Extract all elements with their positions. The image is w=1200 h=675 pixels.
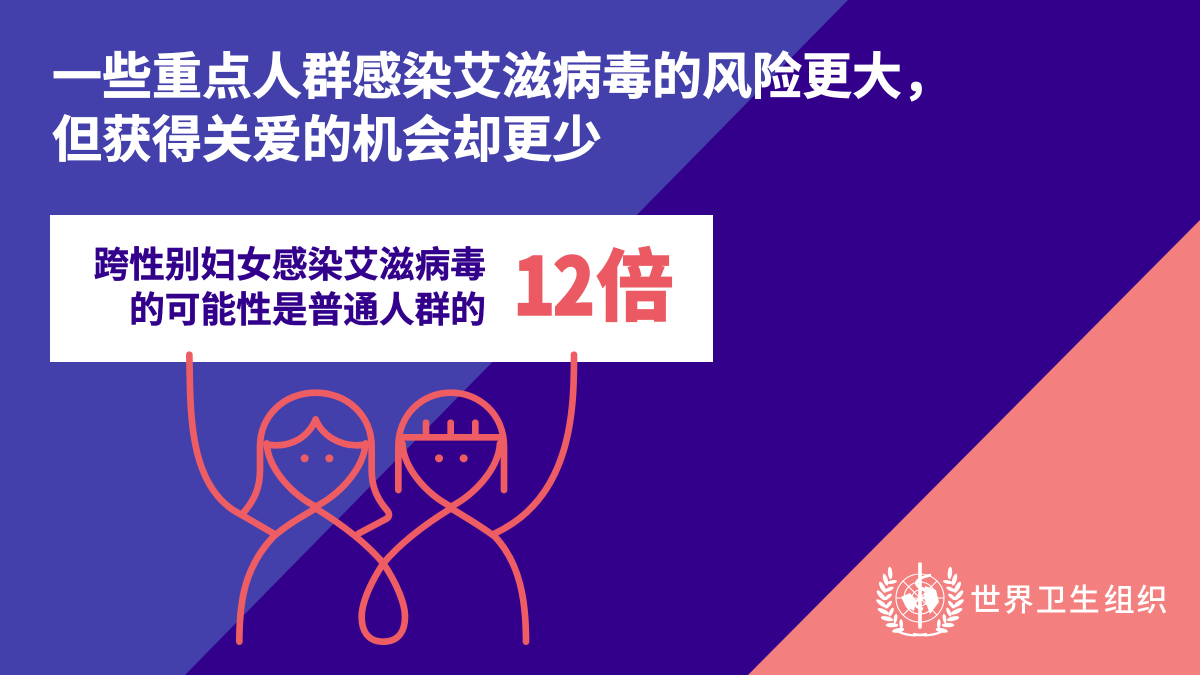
sign text: transgender women statistic: 跨性别妇女感染艾滋病毒 [93, 237, 486, 288]
globe [896, 574, 944, 622]
icon: two women holding sign [186, 351, 578, 645]
big number: 12 times [513, 223, 674, 338]
logo text: 世界卫生组织 [970, 575, 1169, 620]
right woman hair [398, 393, 504, 490]
staff and serpent [918, 564, 922, 627]
title: 一些重点人群感染艾滋病毒的风险更大， [52, 37, 952, 109]
title [52, 37, 952, 172]
panel: white sign [50, 215, 713, 362]
right woman fringe [403, 423, 499, 437]
left woman face [267, 443, 366, 507]
left woman fringe [271, 419, 362, 445]
left arm [189, 355, 273, 533]
big number: 12 times: 倍 [596, 225, 674, 337]
eyes [301, 454, 468, 462]
title: 但获得关爱的机会却更少 [52, 100, 602, 172]
sign text: transgender women statistic: 的可能性是普通人群的 [129, 282, 486, 332]
left body and loop [239, 508, 526, 642]
right woman face [402, 443, 500, 507]
continents [901, 586, 939, 614]
left woman hair [242, 393, 389, 534]
big number: 12 times: 12 [513, 223, 592, 338]
laurel wreath [875, 567, 965, 634]
icon: WHO emblem [876, 562, 964, 636]
sign text: transgender women statistic [93, 237, 486, 332]
right arm [495, 355, 574, 533]
